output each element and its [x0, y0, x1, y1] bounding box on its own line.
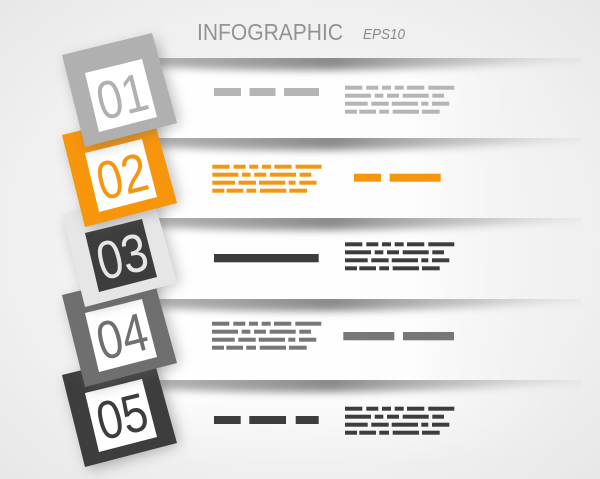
square 03 — [62, 193, 180, 310]
row 5 heading bars — [214, 416, 319, 424]
row 4 text block — [212, 322, 321, 350]
square 02: 02 — [90, 141, 154, 212]
square 01: 01 — [90, 61, 154, 132]
row 2 text block — [212, 165, 322, 193]
panel: row 2 strip — [159, 138, 574, 218]
subtitle: EPS10 — [363, 26, 406, 43]
row 1 heading bars — [214, 88, 319, 96]
square 01 — [62, 33, 180, 150]
title: INFOGRAPHIC — [197, 19, 343, 45]
square 04: 04 — [90, 301, 154, 372]
square 02 — [62, 113, 180, 230]
panel: row 4 strip — [158, 299, 574, 380]
row 3 heading bar — [214, 254, 319, 262]
square 05: 05 — [90, 381, 154, 452]
row 5 text block — [345, 407, 454, 435]
square 04 — [62, 273, 180, 390]
panel: row 3 strip — [159, 218, 574, 299]
row 2 heading bars — [354, 174, 441, 182]
square 03: 03 — [90, 221, 154, 292]
row 3 text block — [345, 242, 454, 270]
square 05 — [62, 353, 180, 470]
row 1 text block — [345, 86, 454, 114]
row 4 heading bars — [343, 332, 454, 340]
panel: row 5 strip — [160, 380, 574, 414]
panel: row 1 strip — [158, 58, 570, 138]
